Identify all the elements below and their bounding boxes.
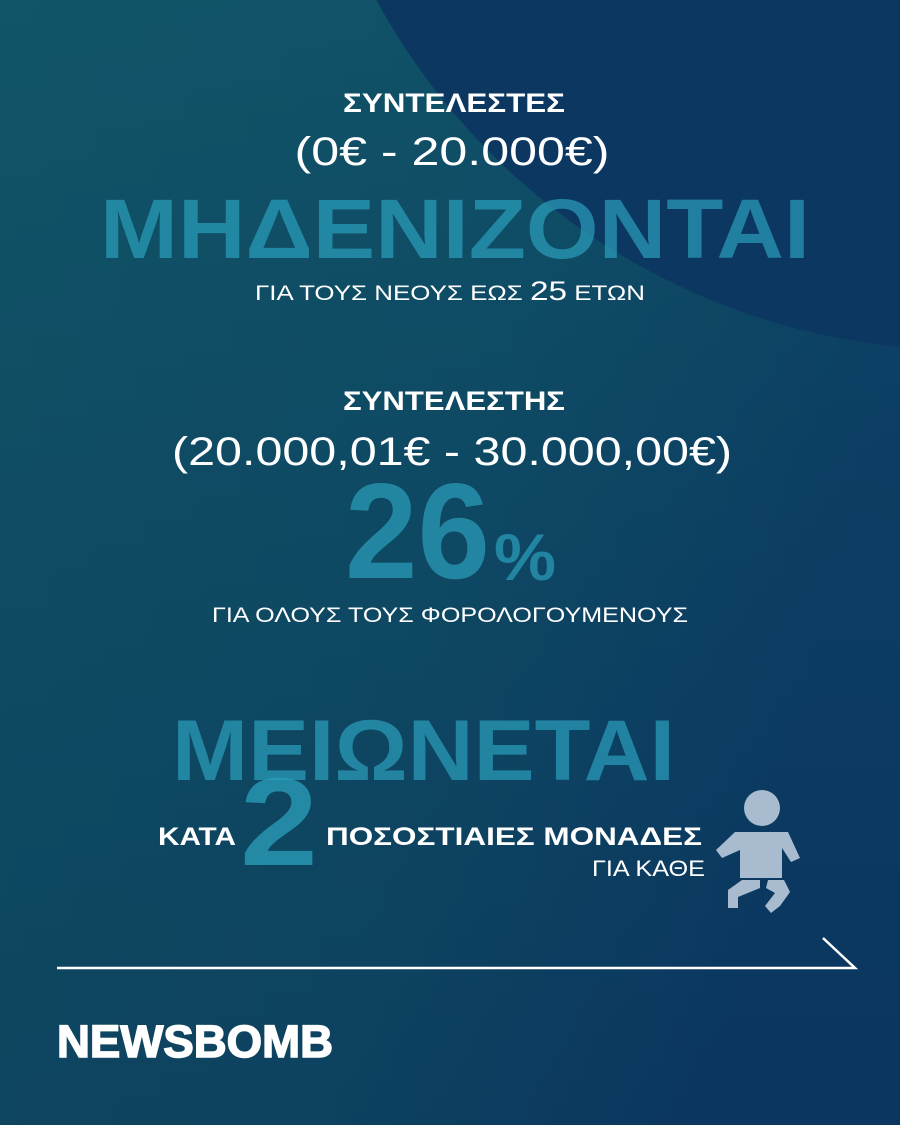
logo: NEWSBOMB: NEWSBOMB bbox=[57, 1016, 333, 1067]
text: ΓΙΑ ΚΑΘΕ: ΓΙΑ ΚΑΘΕ bbox=[592, 856, 705, 881]
arrow line bbox=[57, 938, 855, 968]
subtitle 1: ΓΙΑ ΤΟΥΣ ΝΕΟΥΣ ΕΩΣ 25 ΕΤΩΝ bbox=[255, 276, 645, 306]
range 1: (0€ - 20.000€) bbox=[294, 130, 610, 174]
big word: ΜΗΔΕΝΙΖΟΝΤΑΙ: ΜΗΔΕΝΙΖΟΝΤΑΙ bbox=[100, 182, 810, 276]
heading: ΣΥΝΤΕΛΕΣΤΕΣ: ΣΥΝΤΕΛΕΣΤΕΣ bbox=[343, 88, 565, 118]
subtitle 2: ΓΙΑ ΟΛΟΥΣ ΤΟΥΣ ΦΟΡΟΛΟΓΟΥΜΕΝΟΥΣ bbox=[212, 604, 688, 627]
big number: 2: 2 bbox=[240, 753, 318, 892]
icon: baby bbox=[716, 790, 800, 913]
big number: 26%: % bbox=[494, 520, 556, 594]
text: ΚΑΤΑ: ΚΑΤΑ bbox=[158, 823, 236, 851]
range 2: (20.000,01€ - 30.000,00€) bbox=[172, 430, 732, 474]
big number: 26%: 26 bbox=[345, 455, 490, 607]
text: ΠΟΣΟΣΤΙΑΙΕΣ ΜΟΝΑΔΕΣ: ΠΟΣΟΣΤΙΑΙΕΣ ΜΟΝΑΔΕΣ bbox=[326, 823, 702, 851]
heading: ΣΥΝΤΕΛΕΣΤΗΣ: ΣΥΝΤΕΛΕΣΤΗΣ bbox=[343, 386, 565, 416]
background arc: navy circle bbox=[295, 0, 900, 350]
big word: ΜΕΙΩΝΕΤΑΙ: ΜΕΙΩΝΕΤΑΙ bbox=[172, 703, 675, 799]
